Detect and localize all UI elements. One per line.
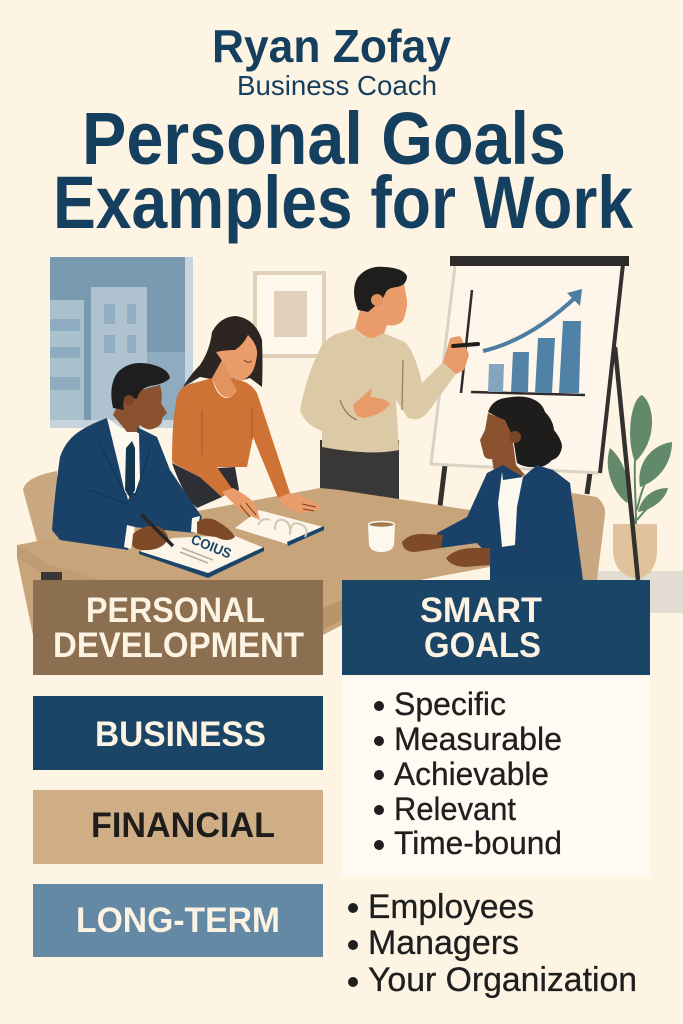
seated woman in navy blazer bbox=[402, 396, 583, 580]
presenter standing bbox=[300, 267, 478, 500]
document on table: left with heading: COIUS bbox=[189, 531, 234, 562]
header: coach name: Business Coach bbox=[237, 70, 437, 101]
left chair bbox=[23, 471, 57, 545]
panel: smart goals list bbox=[342, 677, 650, 876]
right chair bbox=[572, 493, 605, 580]
panel: personal development: DEVELOPMENT bbox=[53, 626, 304, 665]
header: coach name: Ryan Zofay bbox=[212, 20, 451, 72]
seated man in navy suit bbox=[52, 363, 235, 550]
panel: financial: FINANCIAL bbox=[91, 806, 275, 845]
header: coach name bbox=[212, 20, 451, 101]
audience list bbox=[348, 888, 637, 999]
panel: long-term: LONG-TERM bbox=[76, 901, 280, 940]
audience list: Employees bbox=[368, 888, 534, 926]
document on table: right bbox=[235, 510, 324, 546]
flipchart with growth chart bbox=[431, 256, 629, 506]
panel: financial bbox=[33, 790, 323, 864]
window with city view bbox=[50, 257, 193, 428]
panel: personal development: PERSONAL bbox=[86, 591, 265, 630]
panel: personal development bbox=[33, 580, 323, 675]
audience list: Your Organization bbox=[368, 961, 637, 999]
panel: business: BUSINESS bbox=[95, 715, 266, 754]
panel: smart goals list: Measurable bbox=[394, 721, 562, 757]
panel: smart goals list: Achievable bbox=[394, 756, 549, 792]
panel: long-term bbox=[33, 884, 323, 957]
floor strip bbox=[597, 571, 683, 613]
title bbox=[53, 97, 634, 244]
woman in orange sweater bbox=[172, 316, 322, 520]
panel: smart goals list: Specific bbox=[394, 686, 506, 722]
panel: business bbox=[33, 696, 323, 770]
illustration: team meeting bbox=[17, 256, 683, 635]
plant bbox=[608, 347, 672, 580]
meeting table bbox=[17, 488, 500, 635]
panel: smart goals list: Time-bound bbox=[394, 825, 562, 861]
panel: smart goals: GOALS bbox=[424, 626, 541, 665]
document on table: left with heading bbox=[139, 531, 264, 578]
title: Personal Goals bbox=[82, 97, 566, 180]
panel: smart goals list: Relevant bbox=[394, 791, 516, 827]
panel: smart goals: SMART bbox=[420, 591, 542, 630]
coffee cup bbox=[368, 522, 395, 552]
framed picture bbox=[255, 273, 324, 356]
panel: smart goals bbox=[342, 580, 650, 675]
audience list: Managers bbox=[368, 924, 519, 962]
